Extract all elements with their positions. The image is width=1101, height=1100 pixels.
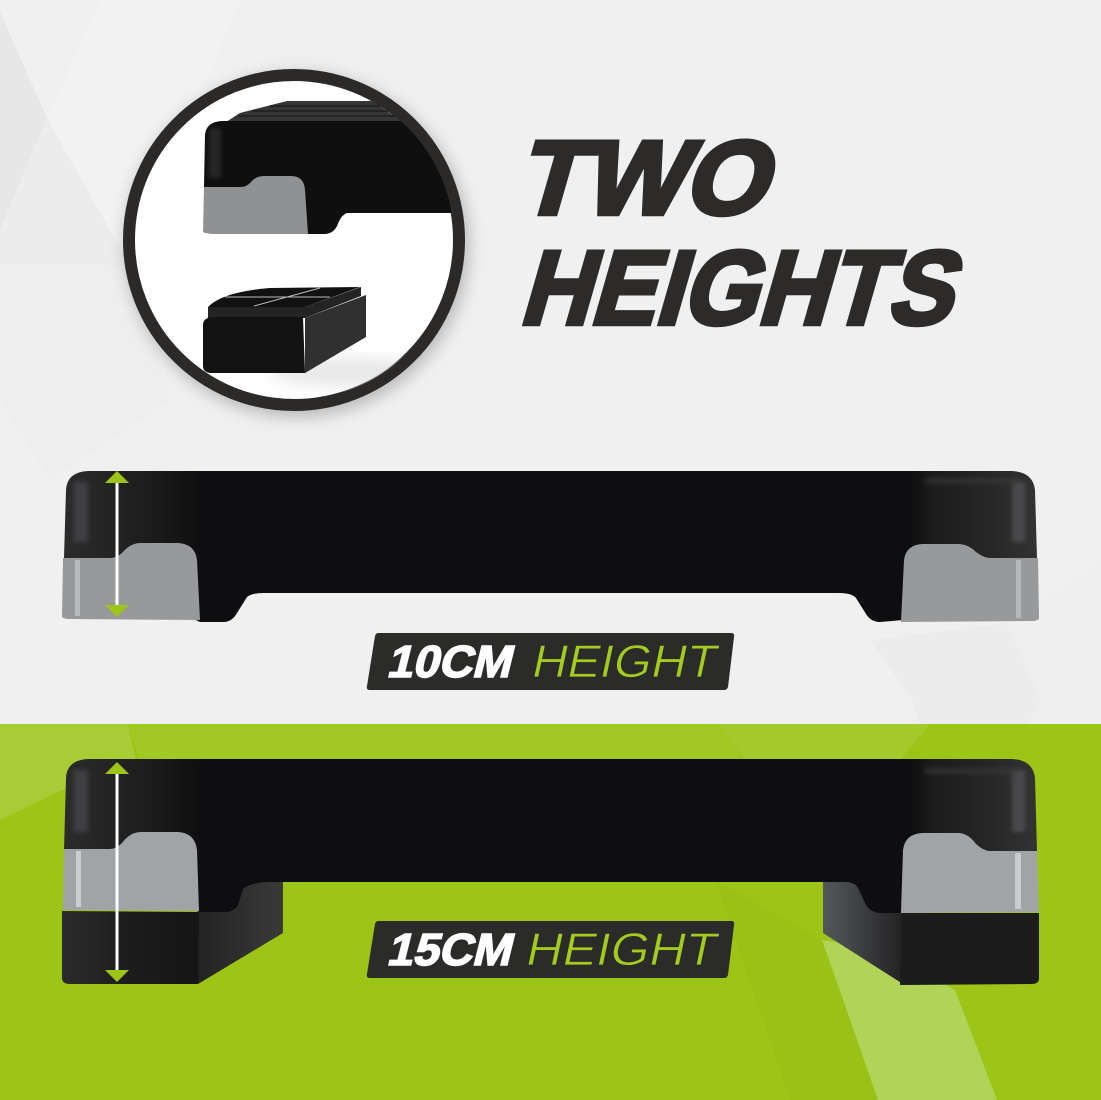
left riser side: [198, 882, 283, 984]
right riser side: [823, 882, 903, 984]
left grey foot: [62, 543, 200, 620]
circle shadow: [125, 73, 469, 417]
right end highlight: [1012, 770, 1025, 832]
circle white face and ring: [129, 75, 459, 405]
left grey band: [63, 832, 199, 911]
right top sheen: [925, 478, 1020, 484]
step body: [64, 759, 1037, 913]
right top sheen: [925, 768, 1020, 774]
label: 10cm height: [367, 633, 734, 690]
background: light upper panel: [0, 0, 1101, 724]
riser shadow: [270, 358, 430, 386]
end highlight: [209, 128, 221, 178]
left base block: [62, 911, 199, 984]
right end highlight: [1012, 482, 1025, 542]
heading line: HEIGHTS: HEIGHTS: [512, 229, 977, 347]
step body: [64, 471, 1037, 622]
left end highlight: [74, 482, 88, 542]
step body: [204, 121, 470, 234]
label: 10cm height: 10CM: [384, 637, 520, 687]
heading: [509, 119, 977, 347]
riser insert: [208, 287, 361, 318]
right grey band: [901, 833, 1039, 913]
step deck surface: [228, 101, 400, 121]
riser grid lines: [225, 288, 330, 306]
10cm step product: [62, 471, 1039, 622]
label: 15cm height: HEIGHT: [522, 923, 723, 975]
inset photo contents: [203, 101, 470, 386]
right grey foot: [901, 544, 1039, 622]
right band shine: [1015, 853, 1021, 909]
left band shine: [76, 851, 81, 907]
arrow: 15cm dimension: [105, 762, 129, 982]
inset circle: step and riser separated: [125, 73, 470, 417]
grey foot: [203, 176, 308, 234]
riser side: [305, 295, 366, 373]
label: 15cm height: 15CM: [384, 925, 520, 975]
left foot shine: [75, 560, 80, 616]
right base block: [900, 913, 1039, 985]
15cm step product: [62, 759, 1039, 985]
label: 15cm height: [367, 921, 734, 978]
right foot shine: [1016, 560, 1021, 618]
deck texture: [238, 106, 396, 116]
background: green lower panel: [0, 724, 1101, 1100]
heading line: TWO: TWO: [509, 119, 792, 237]
left end highlight: [74, 770, 88, 832]
riser front: [203, 317, 305, 373]
label: 10cm height: HEIGHT: [528, 635, 723, 687]
arrow: 10cm dimension: [105, 471, 129, 617]
